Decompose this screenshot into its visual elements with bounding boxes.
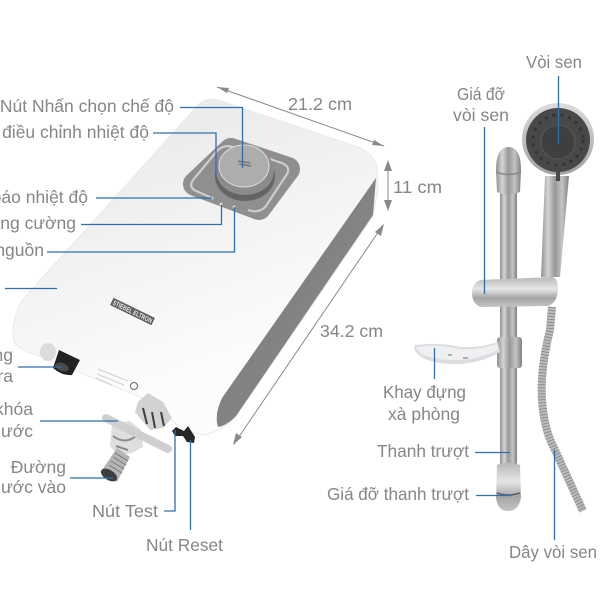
label: rail support: Giá đỡ thanh trượt [327,484,469,504]
label: shower holder: vòi sen [453,105,509,125]
underside label text [96,369,138,390]
label: mode button: Nút Nhấn chọn chế độ [0,96,174,116]
label: soap tray: xà phòng [388,404,460,424]
dimension arrow: width [217,87,384,146]
label: soap tray: Khay đựng [383,382,466,402]
inlet opening [99,466,119,484]
leader: shower head [558,76,560,144]
leader: rail support [476,494,511,496]
leader: shower holder [484,127,486,294]
brand logo: STIEBEL ELTRON [111,300,153,325]
valve dark details [143,408,164,428]
label: reset button: Nút Reset [146,535,223,555]
water heater body [13,99,378,435]
leader: reset button [190,440,192,530]
valve body [110,421,143,456]
brand logo [110,298,155,326]
label: shutoff valve [0,399,33,441]
leader: power lamp [47,207,234,252]
label: shower holder: Giá đỡ [457,84,505,104]
indicator lamps [210,196,236,208]
leader: hose [554,450,556,540]
dimension label: 21.2 cm: 21.2 cm [288,94,352,114]
shower rail [496,147,522,511]
label: shower holder [453,84,509,125]
dimension arrow: depth [384,160,392,211]
outlet black nut [53,350,80,375]
rail cap band [496,172,521,174]
leader: temperature lamp [96,197,212,199]
control panel [191,145,288,211]
label: soap tray [383,382,466,424]
panel plate [195,150,288,208]
leader: slide rail [475,452,510,454]
inlet thread lines [109,453,128,473]
head neck [556,170,560,181]
label: water outlet [0,345,13,386]
leader: body [5,288,57,290]
label: water inlet: Đường [11,457,66,477]
valve body shading [113,436,136,450]
leader: temperature knob [153,133,216,177]
hose ribs [542,307,583,511]
label: slide rail: Thanh trượt [377,441,469,461]
panel light ring [191,146,288,211]
leader: test button [164,430,175,511]
knob logo mark [238,161,251,166]
leader: water inlet [70,477,113,479]
dimension arrow: height [233,224,384,445]
valve handle bar [106,418,168,449]
label: shower head: Vòi sen [526,52,582,72]
body white face [13,99,378,435]
threaded inlet [102,448,130,482]
rail bottom cap [496,462,521,511]
rail top cap [496,147,521,194]
body grey side [217,178,376,427]
hose [542,307,583,511]
label: water inlet [0,457,66,497]
shutoff valve [99,393,172,484]
valve upper chrome elbow [135,393,172,430]
leader: water outlet [18,366,62,368]
label: hose: Dây vòi sen [509,542,597,562]
knob collar [216,147,274,195]
leader: soap tray [434,348,436,379]
dimension label: 11 cm: 11 cm [393,177,442,197]
rail rod [500,190,517,475]
outlet collar [40,343,56,361]
rail bottom band [497,493,520,495]
tray collar [497,337,522,368]
shower head [522,103,594,277]
leader: mode button [180,108,242,168]
soap tray [414,342,500,364]
water outlet fitting [40,343,80,375]
dimension label: 34.2 cm: 34.2 cm [320,321,383,341]
shower holder bracket [472,277,558,307]
test and reset buttons [172,426,195,443]
leader: boost lamp [81,205,222,224]
head inner ring [541,125,575,159]
head rim [522,103,594,175]
outlet opening [54,361,70,373]
label: test button: Nút Test [92,501,158,521]
head nozzles [533,115,583,165]
leader: shutoff valve [40,420,118,422]
handle [541,176,569,277]
knob base [215,151,275,201]
head face [526,108,590,172]
knob top [219,145,269,187]
hose shape [542,307,583,511]
